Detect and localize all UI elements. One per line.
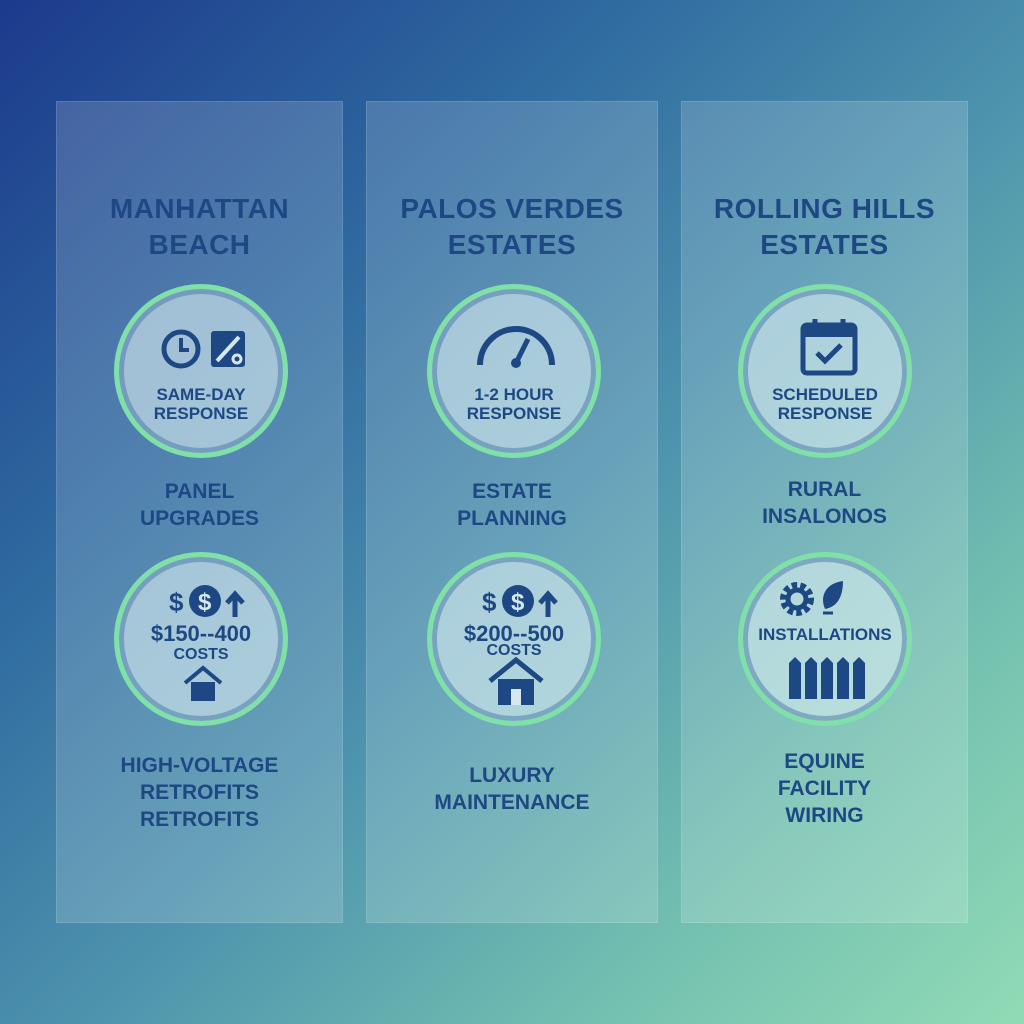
- label: MAINTENANCE: [434, 791, 590, 814]
- heading: PALOS VERDES: [400, 193, 624, 224]
- circle: costs: [427, 552, 601, 726]
- label: PLANNING: [457, 507, 567, 530]
- label: panel upgrades: UPGRADES: [140, 507, 259, 530]
- icon: dollar: $: [511, 589, 525, 616]
- heading: ESTATES: [760, 229, 889, 260]
- heading: MANHATTAN: [110, 193, 289, 224]
- text: SAME-DAY: [156, 385, 246, 404]
- heading: BEACH: [148, 229, 251, 260]
- icon: clock and tools: [162, 330, 245, 368]
- circle: costs: [114, 552, 288, 726]
- icon: gauge: [477, 326, 555, 368]
- text: INSTALLATIONS: [758, 625, 892, 644]
- text: $150--400: [151, 621, 251, 646]
- label: panel upgrades: PANEL: [165, 480, 234, 503]
- label: [434, 764, 590, 814]
- circle: 1-2 hour: [427, 284, 601, 458]
- circle: costs: COSTS: [173, 646, 229, 663]
- panel: Manhattan Beach: [56, 101, 343, 923]
- icon: dollar: $: [169, 587, 184, 617]
- heading: [400, 193, 624, 260]
- text: RESPONSE: [154, 404, 248, 423]
- icon: dollar: $: [482, 587, 497, 617]
- label: LUXURY: [469, 764, 555, 787]
- label: HIGH-VOLTAGE: [121, 754, 278, 777]
- heading: [110, 193, 289, 260]
- circle: installations: [738, 552, 912, 726]
- label: WIRING: [785, 804, 864, 827]
- label: EQUINE: [784, 750, 865, 773]
- text: RESPONSE: [778, 404, 872, 423]
- label: ESTATE: [472, 480, 552, 503]
- label: [457, 480, 567, 530]
- icon: dollar: $: [198, 589, 212, 616]
- text: [772, 385, 878, 423]
- label: [762, 478, 887, 528]
- icon: dollar: [482, 585, 558, 617]
- circle: scheduled: [738, 284, 912, 458]
- icon: fence: [789, 657, 865, 699]
- heading: ROLLING HILLS: [714, 193, 935, 224]
- circle: same-day response: [114, 284, 288, 458]
- icon: gear and leaf: [780, 581, 843, 616]
- label: RETROFITS: [140, 808, 259, 831]
- icon: house: [184, 666, 222, 701]
- text: [467, 385, 561, 423]
- circle: costs: COSTS: [486, 642, 542, 659]
- label: RURAL: [788, 478, 861, 501]
- text: 1-2 HOUR: [474, 385, 554, 404]
- text: RESPONSE: [467, 404, 561, 423]
- heading: ESTATES: [448, 229, 576, 260]
- icon: calendar: [800, 319, 858, 376]
- label: panel upgrades: [140, 480, 259, 530]
- heading: [714, 193, 935, 260]
- text: $200--500: [464, 621, 564, 646]
- label: [778, 750, 871, 827]
- label: [121, 754, 278, 831]
- panel: Palos Verdes Estates: [366, 101, 658, 923]
- icon: dollar: [169, 585, 245, 617]
- label: FACILITY: [778, 777, 871, 800]
- label: RETROFITS: [140, 781, 259, 804]
- text: [154, 385, 248, 423]
- panel: Rolling Hills Estates: [681, 101, 968, 923]
- label: INSALONOS: [762, 505, 887, 528]
- icon: house: [488, 657, 544, 705]
- text: SCHEDULED: [772, 385, 878, 404]
